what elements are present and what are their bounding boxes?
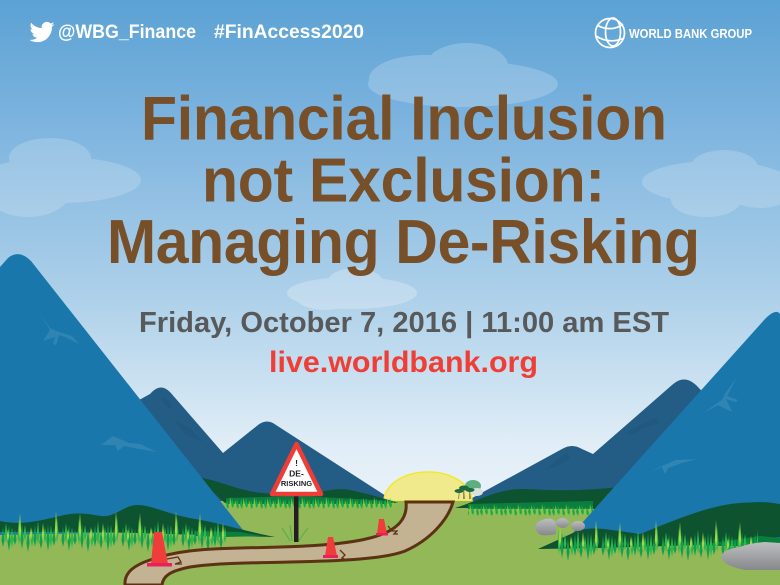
title: not Exclusion: — [202, 145, 605, 215]
date and time: Friday, October 7, 2016 | 11:00 am EST — [139, 307, 669, 339]
left mountain birds — [39, 313, 157, 452]
sign text: DE- — [289, 468, 304, 478]
grass: right front — [558, 514, 758, 564]
palm trees — [454, 480, 483, 499]
hill: right front dark green — [538, 502, 780, 549]
grass: right back strip — [468, 501, 593, 516]
world bank group wordmark: WORLD BANK GROUP — [629, 27, 752, 41]
left big mountain — [0, 254, 243, 535]
title: Managing De-Risking — [107, 207, 700, 276]
mountains: right back range — [452, 380, 720, 520]
warning sign — [272, 444, 321, 494]
road cracks — [167, 526, 398, 564]
hill: left front bright band — [195, 531, 262, 537]
sign text: ! — [295, 458, 298, 468]
grass: left front — [0, 505, 226, 555]
grass: left back strip — [226, 496, 395, 509]
title — [107, 83, 700, 276]
cloud: lower centre — [287, 268, 417, 310]
hills: right back dark green — [455, 487, 620, 510]
big rock — [721, 542, 780, 570]
small rocks — [535, 518, 585, 535]
hill: right front bright band — [700, 536, 780, 546]
cone 1 — [147, 532, 172, 566]
sun — [384, 472, 472, 501]
hashtag: #FinAccess2020 — [214, 22, 364, 43]
cone 3 — [376, 519, 388, 536]
right mountain birds — [638, 377, 738, 478]
sign text: RISKING — [281, 479, 312, 488]
road — [125, 502, 453, 585]
cone 2 — [323, 537, 338, 558]
hill: left front dark green — [0, 505, 275, 537]
right big mountain — [570, 312, 780, 545]
website link: live.worldbank.org — [269, 346, 538, 379]
cloud: left — [0, 138, 141, 217]
back mountain birds — [162, 396, 660, 470]
twitter handle: @WBG_Finance — [58, 22, 196, 43]
hills: left back dark green — [195, 476, 398, 503]
sign post — [294, 495, 298, 542]
cloud: right — [642, 150, 780, 217]
twitter icon — [30, 22, 54, 42]
world bank globe logo — [596, 18, 624, 48]
mountains: left back range — [130, 387, 400, 505]
sign tufts — [282, 525, 308, 541]
ground — [0, 501, 780, 585]
cloud: top centre — [368, 43, 558, 107]
title: Financial Inclusion — [141, 83, 667, 153]
